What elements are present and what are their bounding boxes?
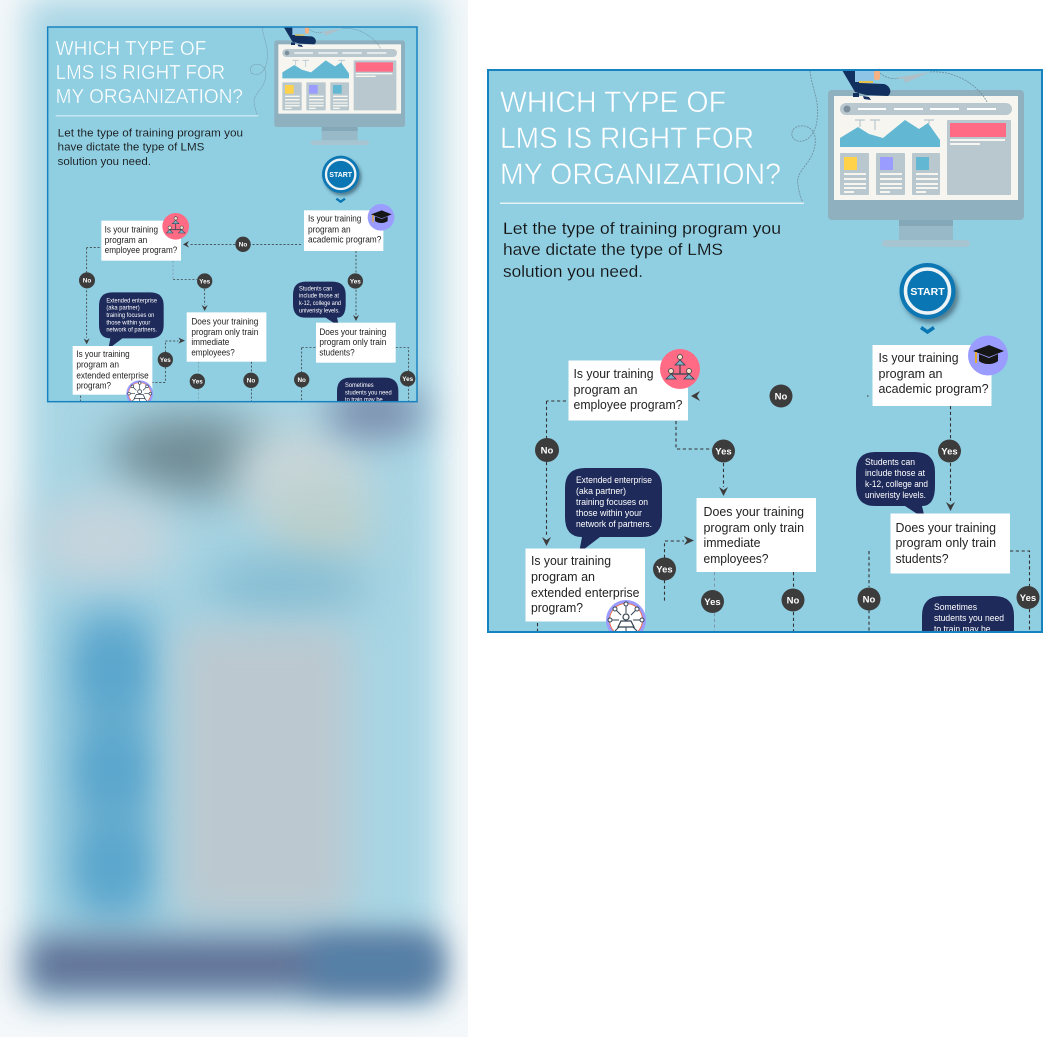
title (500, 91, 780, 184)
icon: partner network (126, 380, 153, 401)
decision badges (79, 237, 415, 389)
question box: extended enterprise (526, 548, 645, 622)
title: LMS IS RIGHT FOR (500, 122, 754, 155)
question box: extended enterprise: Is your training (76, 349, 130, 359)
icon: graduation cap (968, 336, 1008, 376)
callout: extended enterprise: network of partners. (576, 518, 652, 529)
title: WHICH TYPE OF (56, 38, 206, 60)
question box: academic program: academic program? (878, 381, 988, 396)
question box: immediate employees (187, 312, 266, 362)
decision badges: Yes (1020, 593, 1036, 604)
question box: employee program: Is your training (105, 224, 158, 234)
question box: employee program: employee program? (105, 245, 177, 255)
question box: immediate employees: program only train (704, 520, 804, 535)
question box: students: program only train (319, 337, 386, 347)
callout: students: include those at (299, 293, 339, 300)
illustration: desktop monitor (274, 40, 405, 145)
question box: students: Does your training (319, 327, 386, 337)
decision badges (535, 384, 1040, 613)
decision badges: No (83, 278, 91, 285)
intro text: solution you need. (58, 156, 151, 168)
callout: sometimes students: students you need (345, 389, 392, 396)
callout: sometimes students (922, 596, 1014, 640)
callout: extended enterprise: those within your (106, 319, 150, 326)
decision badges: Yes (704, 597, 721, 608)
callout: sometimes students: Sometimes (345, 382, 374, 389)
callout: sometimes students: to train may be (345, 397, 383, 404)
icon: team hierarchy (162, 213, 189, 240)
callout: sometimes students: Sometimes (934, 601, 977, 612)
decision badges: No (863, 594, 876, 606)
question box: extended enterprise: program? (76, 380, 111, 390)
callout: extended enterprise: training focuses on (106, 312, 155, 319)
callout: students: Students can (299, 285, 333, 292)
callout: extended enterprise: those within your (576, 507, 642, 518)
question box: academic program (872, 345, 992, 406)
start button: START (329, 172, 353, 179)
question box: students (890, 514, 1010, 574)
start button (322, 156, 359, 202)
decision badges: Yes (656, 564, 673, 576)
intro text (503, 219, 781, 281)
callout: students: Students can (865, 456, 915, 467)
connector lines (538, 396, 1030, 632)
illustration: person sitting on monitor (842, 70, 890, 100)
title: MY ORGANIZATION? (500, 158, 781, 191)
decision badges: Yes (199, 278, 211, 285)
question box: academic program (304, 210, 383, 251)
intro text: have dictate the type of LMS (58, 141, 204, 153)
decision badges: No (247, 378, 255, 385)
callout: extended enterprise (565, 468, 662, 553)
question box: students: Does your training (896, 520, 996, 535)
decision badges: Yes (402, 376, 414, 383)
callout: students: k-12, college and (865, 478, 928, 489)
callout: extended enterprise (99, 292, 164, 349)
decision badges: Yes (350, 278, 361, 285)
question box: students: program only train (896, 535, 996, 550)
decision badges: Yes (715, 446, 732, 458)
question box: extended enterprise: program? (531, 600, 583, 615)
decision badges: No (239, 242, 247, 249)
callout: sometimes students: to train may be (934, 623, 990, 634)
callout: students: univeristy levels. (299, 307, 340, 314)
illustration: desktop monitor (828, 90, 1024, 247)
question box: extended enterprise: Is your training (531, 553, 611, 568)
arrowheads (84, 241, 359, 344)
intro text (58, 127, 243, 168)
callout: sometimes students (337, 378, 398, 401)
question box: employee program: Is your training (574, 366, 654, 381)
question box: extended enterprise: extended enterprise (531, 585, 640, 600)
decision badges: No (541, 446, 554, 456)
intro text: Let the type of training program you (58, 127, 243, 139)
decision badges: Yes (192, 379, 203, 386)
icon: partner network (606, 600, 646, 640)
blurred background: hidden lower part of the infographic (0, 0, 468, 1037)
callout: extended enterprise: training focuses on (576, 496, 648, 507)
intro text: Let the type of training program you (503, 219, 781, 238)
question box: extended enterprise: extended enterprise (76, 370, 149, 380)
decorative curly path (250, 28, 267, 116)
callout: extended enterprise: Extended enterprise (106, 297, 157, 304)
decorative curly path (792, 71, 818, 203)
icon: graduation cap (368, 204, 394, 231)
question box: immediate employees: immediate (704, 535, 760, 550)
intro text: have dictate the type of LMS (503, 240, 723, 259)
connector lines (81, 244, 409, 402)
callout: students: include those at (865, 467, 925, 478)
question box: extended enterprise (73, 346, 152, 395)
question box: extended enterprise: program an (531, 569, 595, 584)
title: LMS IS RIGHT FOR (56, 62, 225, 84)
callout: students: k-12, college and (299, 300, 341, 307)
question box: employee program (101, 221, 181, 261)
question box: academic program: program an (308, 224, 351, 234)
illustration: paper airplane and flight path (309, 28, 380, 48)
question box: immediate employees: program only train (191, 327, 258, 337)
decision badges: No (297, 377, 306, 384)
question box: academic program: Is your training (308, 214, 361, 224)
question box: academic program: academic program? (308, 234, 381, 244)
callout: extended enterprise: (aka partner) (576, 485, 626, 496)
decision badges: No (775, 392, 788, 402)
callout: extended enterprise: Extended enterprise (576, 474, 652, 485)
icon: team hierarchy (660, 349, 700, 389)
question box: immediate employees: employees? (704, 551, 768, 566)
illustration: person sitting on monitor (284, 27, 316, 47)
question box: students: students? (319, 348, 355, 358)
callout: extended enterprise: (aka partner) (106, 305, 140, 312)
question box: immediate employees: Does your training (191, 316, 258, 326)
question box: employee program: program an (105, 235, 147, 245)
start button (900, 263, 956, 332)
illustration: paper airplane and flight path (880, 72, 987, 102)
intro text: solution you need. (503, 262, 643, 281)
start button: START (910, 286, 945, 298)
question box: immediate employees: Does your training (704, 504, 804, 519)
question box: students: students? (896, 551, 948, 566)
question box: immediate employees: employees? (191, 348, 235, 358)
question box: students (316, 323, 396, 363)
decision badges: Yes (941, 446, 958, 458)
panel: small preview of the flowchart (48, 27, 417, 407)
question box: employee program: employee program? (574, 397, 682, 412)
question box: extended enterprise: program an (76, 360, 119, 370)
callout: students (293, 282, 346, 326)
question box: academic program: program an (878, 366, 942, 381)
question box: immediate employees (696, 498, 816, 572)
callout: extended enterprise: network of partners. (106, 327, 157, 334)
panel: enlarged view of the flowchart (488, 70, 1042, 640)
question box: employee program (568, 360, 688, 420)
question box: academic program: Is your training (878, 350, 958, 365)
title: WHICH TYPE OF (500, 86, 726, 119)
callout: sometimes students: students you need (934, 612, 1004, 623)
title (56, 41, 242, 103)
question box: employee program: program an (574, 382, 638, 397)
title: MY ORGANIZATION? (56, 86, 243, 108)
question box: immediate employees: immediate (191, 337, 229, 347)
callout: students: univeristy levels. (865, 489, 926, 500)
decision badges: No (787, 596, 800, 606)
decision badges: Yes (160, 357, 171, 364)
callout: students (856, 452, 935, 519)
arrowheads (542, 391, 955, 546)
